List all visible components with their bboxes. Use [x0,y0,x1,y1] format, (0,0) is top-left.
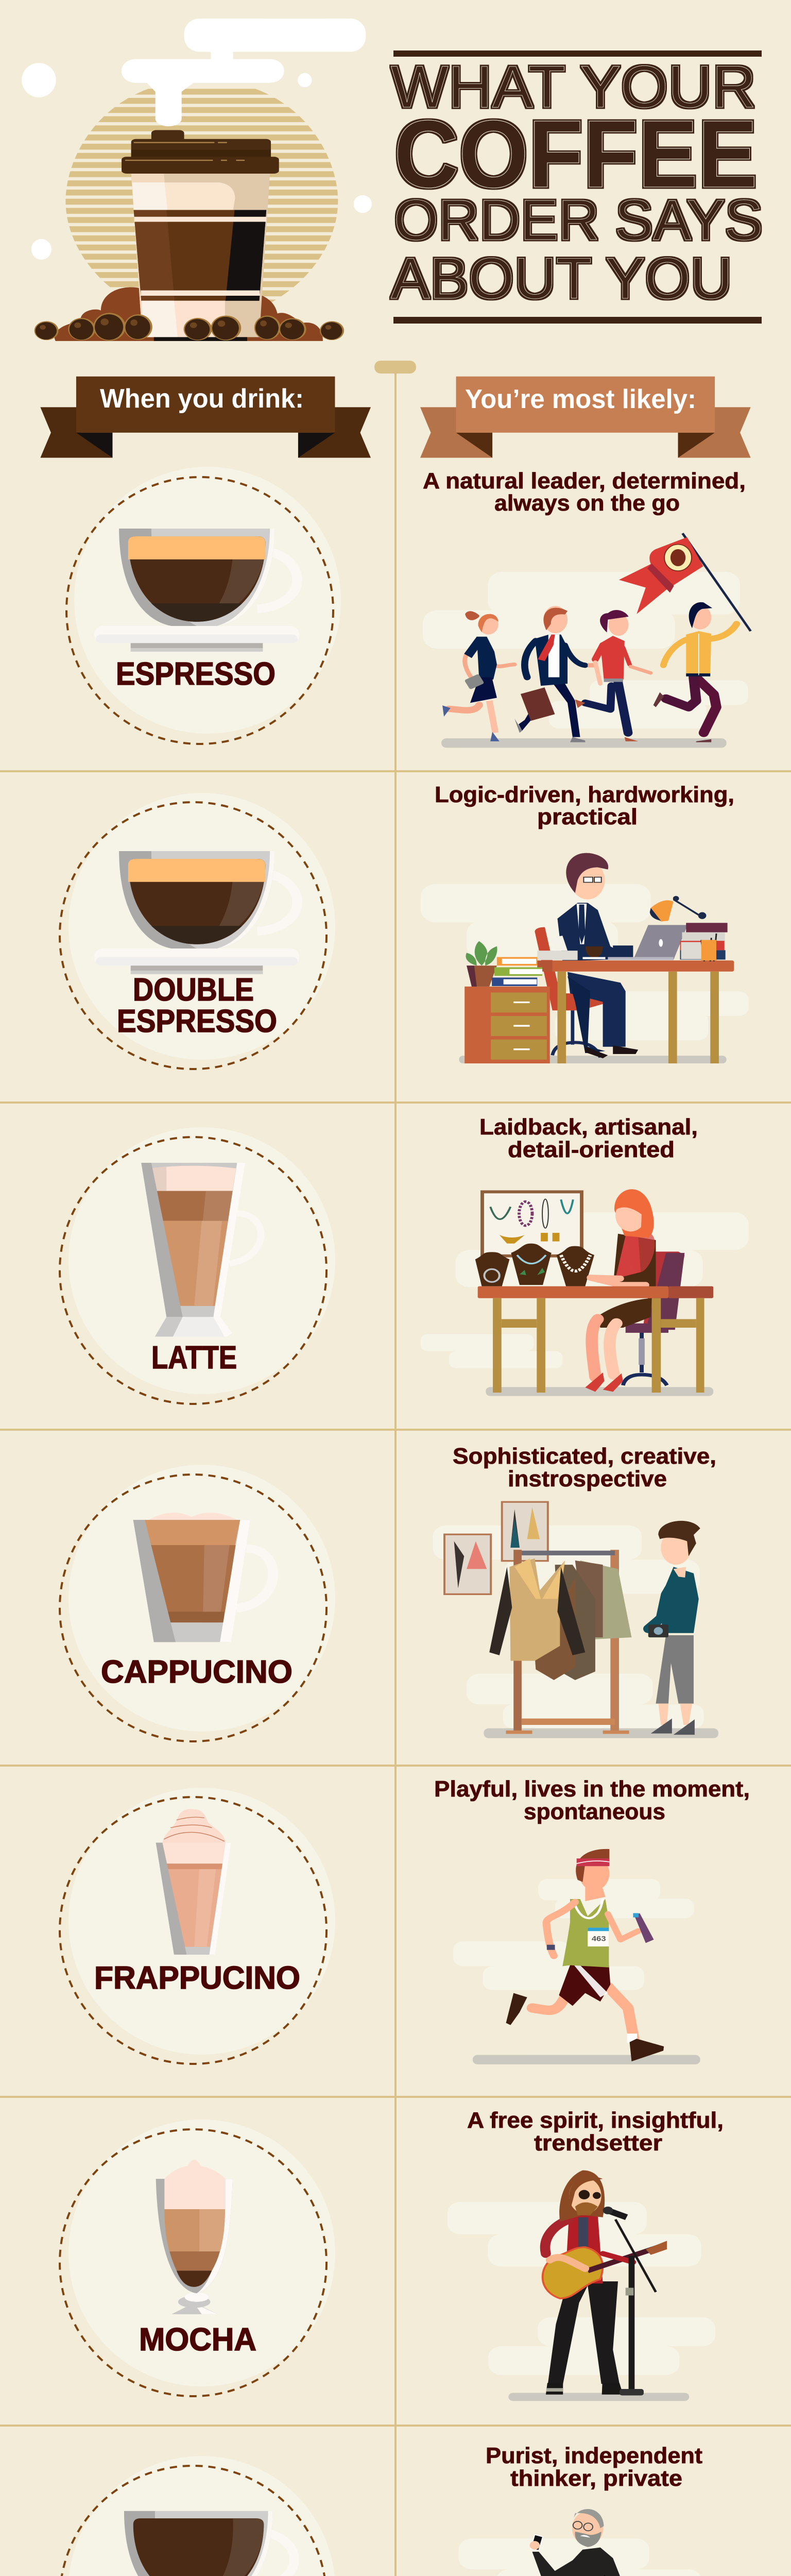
icon: espresso cup [94,529,299,652]
drink badge: espresso [66,467,341,744]
trait text [479,1114,698,1162]
trait text: practical [537,804,638,829]
drink badge: frappucino [60,1788,335,2064]
label: latte: LATTE [151,1340,237,1376]
illustration: fashion designer with clothes rack [433,1502,718,1738]
banner: you're most likely [420,377,751,458]
drink badge: double espresso [60,793,335,1069]
illustration: jewellery artisan at table [421,1189,749,1396]
trait text: Laidback, artisanal, [479,1114,698,1140]
trait text: spontaneous [524,1799,665,1824]
label: double espresso: ESPRESSO [117,1004,277,1039]
trait text [486,2443,702,2491]
illustration: team running with flag [423,533,751,748]
icon: black coffee cup [100,2511,296,2576]
drink badge: mocha [60,2120,335,2396]
drink badge: latte [60,1127,335,1404]
title line: about you: ABOUT YOU [391,246,732,311]
trait text [434,1776,750,1824]
icon: double espresso cup [94,851,299,974]
drink badge: cappucino [60,1465,335,1741]
icon: frappucino glass [156,1809,231,1955]
cup [122,130,279,341]
row: cappucino [60,1444,718,1741]
trait text: Playful, lives in the moment, [434,1776,750,1802]
label: espresso: ESPRESSO [116,656,276,692]
illustration: runner: 463 [592,1935,606,1943]
title line: what your: WHAT YOUR [391,54,756,120]
trait text: instrospective [508,1466,667,1492]
label: frappucino: FRAPPUCINO [94,1960,300,1996]
label: double espresso [117,972,277,1039]
trait text [423,468,746,516]
illustration: runner [453,1849,700,2064]
milk splash [22,19,372,260]
trait text: A natural leader, determined, [423,468,746,494]
header illustration: takeaway coffee cup with milk and beans [22,19,372,341]
row: double espresso [60,782,749,1069]
label: double espresso: DOUBLE [133,972,254,1008]
coffee beans [35,313,344,341]
title block [391,50,763,324]
trait text: A free spirit, insightful, [467,2108,724,2133]
illustration: man working at desk [421,853,749,1063]
label: cappucino: CAPPUCINO [101,1654,293,1690]
row: latte [60,1114,749,1404]
trait text [435,782,734,829]
banner: when you drink [40,377,371,458]
trait text: Sophisticated, creative, [453,1444,716,1469]
row: black coffee [60,2443,720,2576]
row: frappucino [60,1776,750,2064]
trait text: Purist, independent [486,2443,702,2468]
icon: mocha glass [156,2160,233,2314]
coffee grounds mound [55,287,323,341]
icon: cappucino mug [133,1513,273,1642]
illustration: older man with phone [444,2509,720,2576]
trait text: Logic-driven, hardworking, [435,782,734,807]
trait text [467,2108,724,2156]
trait text [453,1444,716,1492]
banner: you're most likely: You’re most likely: [465,384,696,414]
title line: order says: ORDER SAYS [394,189,763,252]
row: espresso [66,467,751,748]
icon: latte glass [141,1163,261,1336]
title line: coffee: COFFEE [394,101,758,208]
trait text: always on the go [494,490,680,516]
illustration: guitarist with microphone [448,2171,715,2401]
trait text: thinker, private [510,2466,682,2491]
striped bean backdrop [65,89,338,302]
banner: when you drink: When you drink: [100,384,304,414]
trait text: detail-oriented [508,1137,675,1162]
label: mocha: MOCHA [139,2322,256,2358]
drink badge: black coffee [60,2456,335,2576]
trait text: trendsetter [534,2130,662,2156]
row: mocha [60,2108,724,2401]
